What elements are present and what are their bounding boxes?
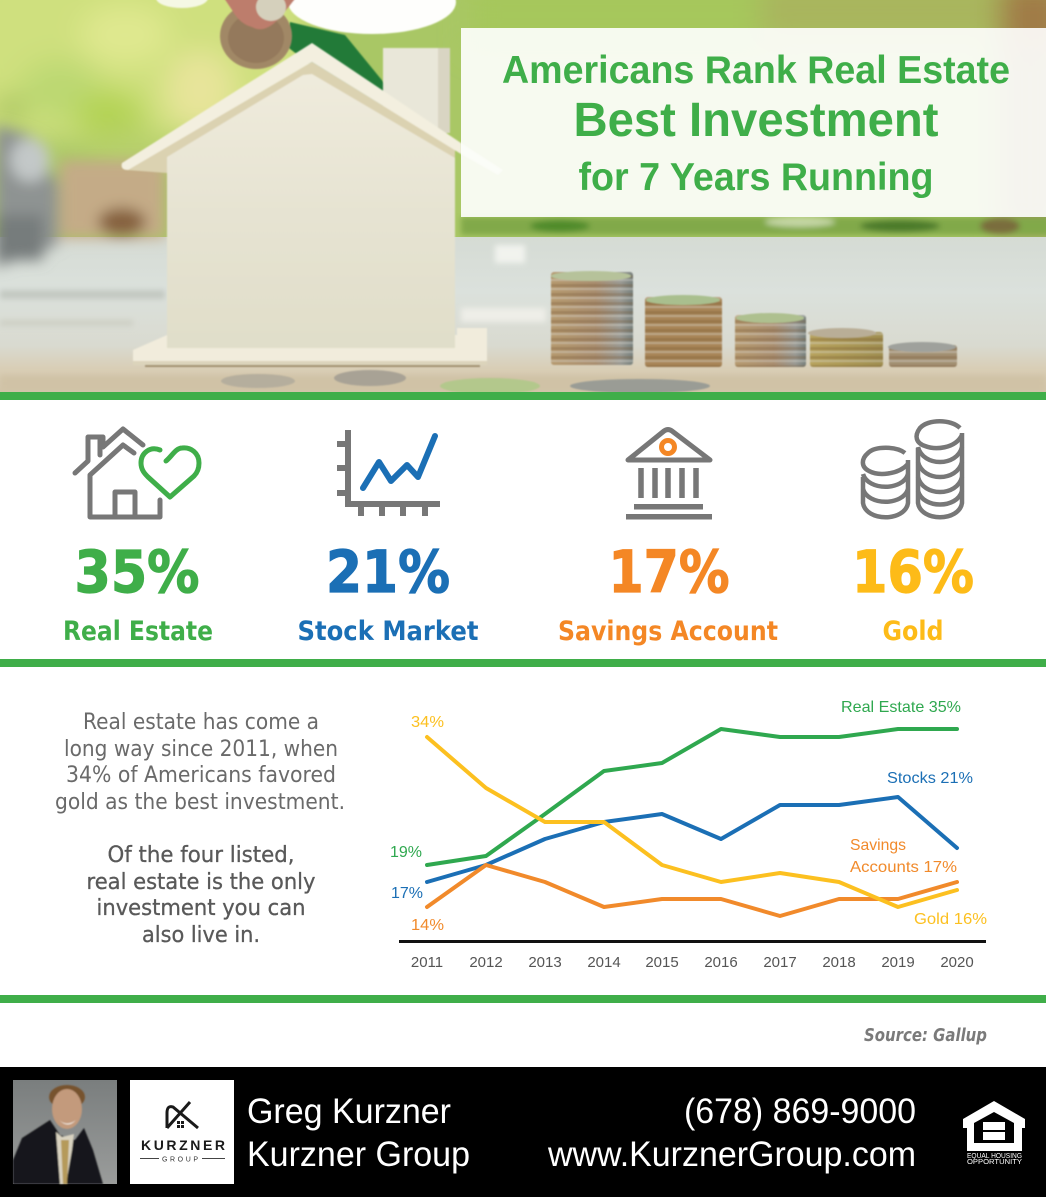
year labels: 2012 [469, 954, 503, 971]
series labels: Real Estate 35% [841, 699, 961, 716]
series labels: 17% [391, 885, 423, 902]
year labels: 2011 [411, 954, 443, 971]
title panel: Best Investment [574, 94, 939, 147]
footer bar: Kurzner Group [247, 1135, 470, 1174]
series labels: 14% [411, 917, 444, 934]
contact details: (678) 869-9000 [684, 1092, 916, 1131]
icon: chart [337, 430, 440, 516]
middle green divider [0, 659, 1046, 667]
agent name: Greg Kurzner [247, 1092, 451, 1131]
line: savings [427, 865, 957, 916]
house [122, 43, 503, 367]
series labels: Gold 16% [914, 911, 987, 928]
line: real estate [427, 729, 957, 865]
icon: equal housing opportunity [963, 1101, 1025, 1166]
panel: stock market stat: 21% [326, 538, 450, 606]
year labels: 2014 [587, 954, 621, 971]
panel: savings account stat: Savings Account [558, 616, 778, 647]
text block: only investment you can live in: investment you can [96, 896, 306, 921]
company logo [130, 1080, 234, 1184]
line: stocks [427, 797, 957, 882]
year labels: 2016 [704, 954, 738, 971]
line chart [390, 699, 987, 971]
text block: only investment you can live in [86, 843, 316, 948]
series labels: 19% [390, 844, 422, 861]
title panel: Americans Rank Real Estate [502, 49, 1010, 92]
year labels: 2015 [645, 954, 679, 971]
panel: real estate stat: 35% [74, 538, 200, 606]
panel: gold stat: 16% [852, 538, 974, 606]
company logo: KURZNER [141, 1137, 225, 1153]
text block: only investment you can live in: real estate is the only [86, 870, 316, 895]
company logo: GROUP [162, 1156, 198, 1164]
hero photo: model house and coins [0, 0, 1046, 394]
bottom green divider [0, 995, 1046, 1003]
panel: real estate stat: Real Estate [63, 616, 213, 647]
hand and coin [220, 0, 298, 69]
icon: bank [626, 430, 712, 520]
footer bar: www.KurznerGroup.com [547, 1135, 916, 1174]
series labels: 34% [411, 714, 444, 731]
panel: savings account stat [558, 430, 778, 647]
source note: Source: Gallup [864, 1025, 987, 1046]
series labels: Stocks 21% [887, 770, 973, 787]
icon: K house mark [167, 1102, 198, 1128]
series labels: Savings [850, 837, 906, 854]
text block: gold history: 34% of Americans favored [66, 763, 336, 788]
icon: equal housing opportunity: OPPORTUNITY [967, 1159, 1022, 1166]
year labels: 2018 [822, 954, 856, 971]
coin stacks [551, 271, 957, 367]
panel: stock market stat: Stock Market [298, 616, 479, 647]
icon: equal housing opportunity: EQUAL HOUSING [967, 1153, 1022, 1160]
chart axis [399, 940, 986, 943]
year labels: 2013 [528, 954, 562, 971]
text block: only investment you can live in: also live in. [142, 923, 260, 948]
text block: only investment you can live in: Of the four listed, [108, 843, 294, 868]
band below title [461, 217, 1046, 235]
text block: gold history: long way since 2011, when [64, 737, 338, 762]
white background blob [288, 0, 456, 34]
panel: stock market stat [298, 430, 479, 647]
icon: coin stacks [863, 421, 962, 517]
text block: gold history: gold as the best investment. [55, 790, 345, 815]
text block: gold history [55, 710, 345, 815]
title panel [461, 28, 1046, 217]
agent photo [13, 1080, 117, 1184]
panel: savings account stat: 17% [608, 538, 730, 606]
icon: house with heart [75, 429, 199, 517]
year labels [411, 954, 974, 971]
panel: gold stat: Gold [882, 616, 944, 647]
year labels: 2020 [940, 954, 974, 971]
top green divider [0, 392, 1046, 400]
title panel: for 7 Years Running [578, 156, 934, 199]
blurred background objects at left [0, 125, 165, 268]
panel: real estate stat [63, 429, 213, 647]
year labels: 2017 [763, 954, 797, 971]
series labels: Accounts 17% [850, 859, 957, 876]
line: gold [427, 737, 957, 907]
year labels: 2019 [881, 954, 915, 971]
text block: gold history: Real estate has come a [83, 710, 319, 735]
series labels [390, 699, 987, 934]
footer bar [0, 1067, 1046, 1197]
panel: gold stat [852, 421, 974, 647]
